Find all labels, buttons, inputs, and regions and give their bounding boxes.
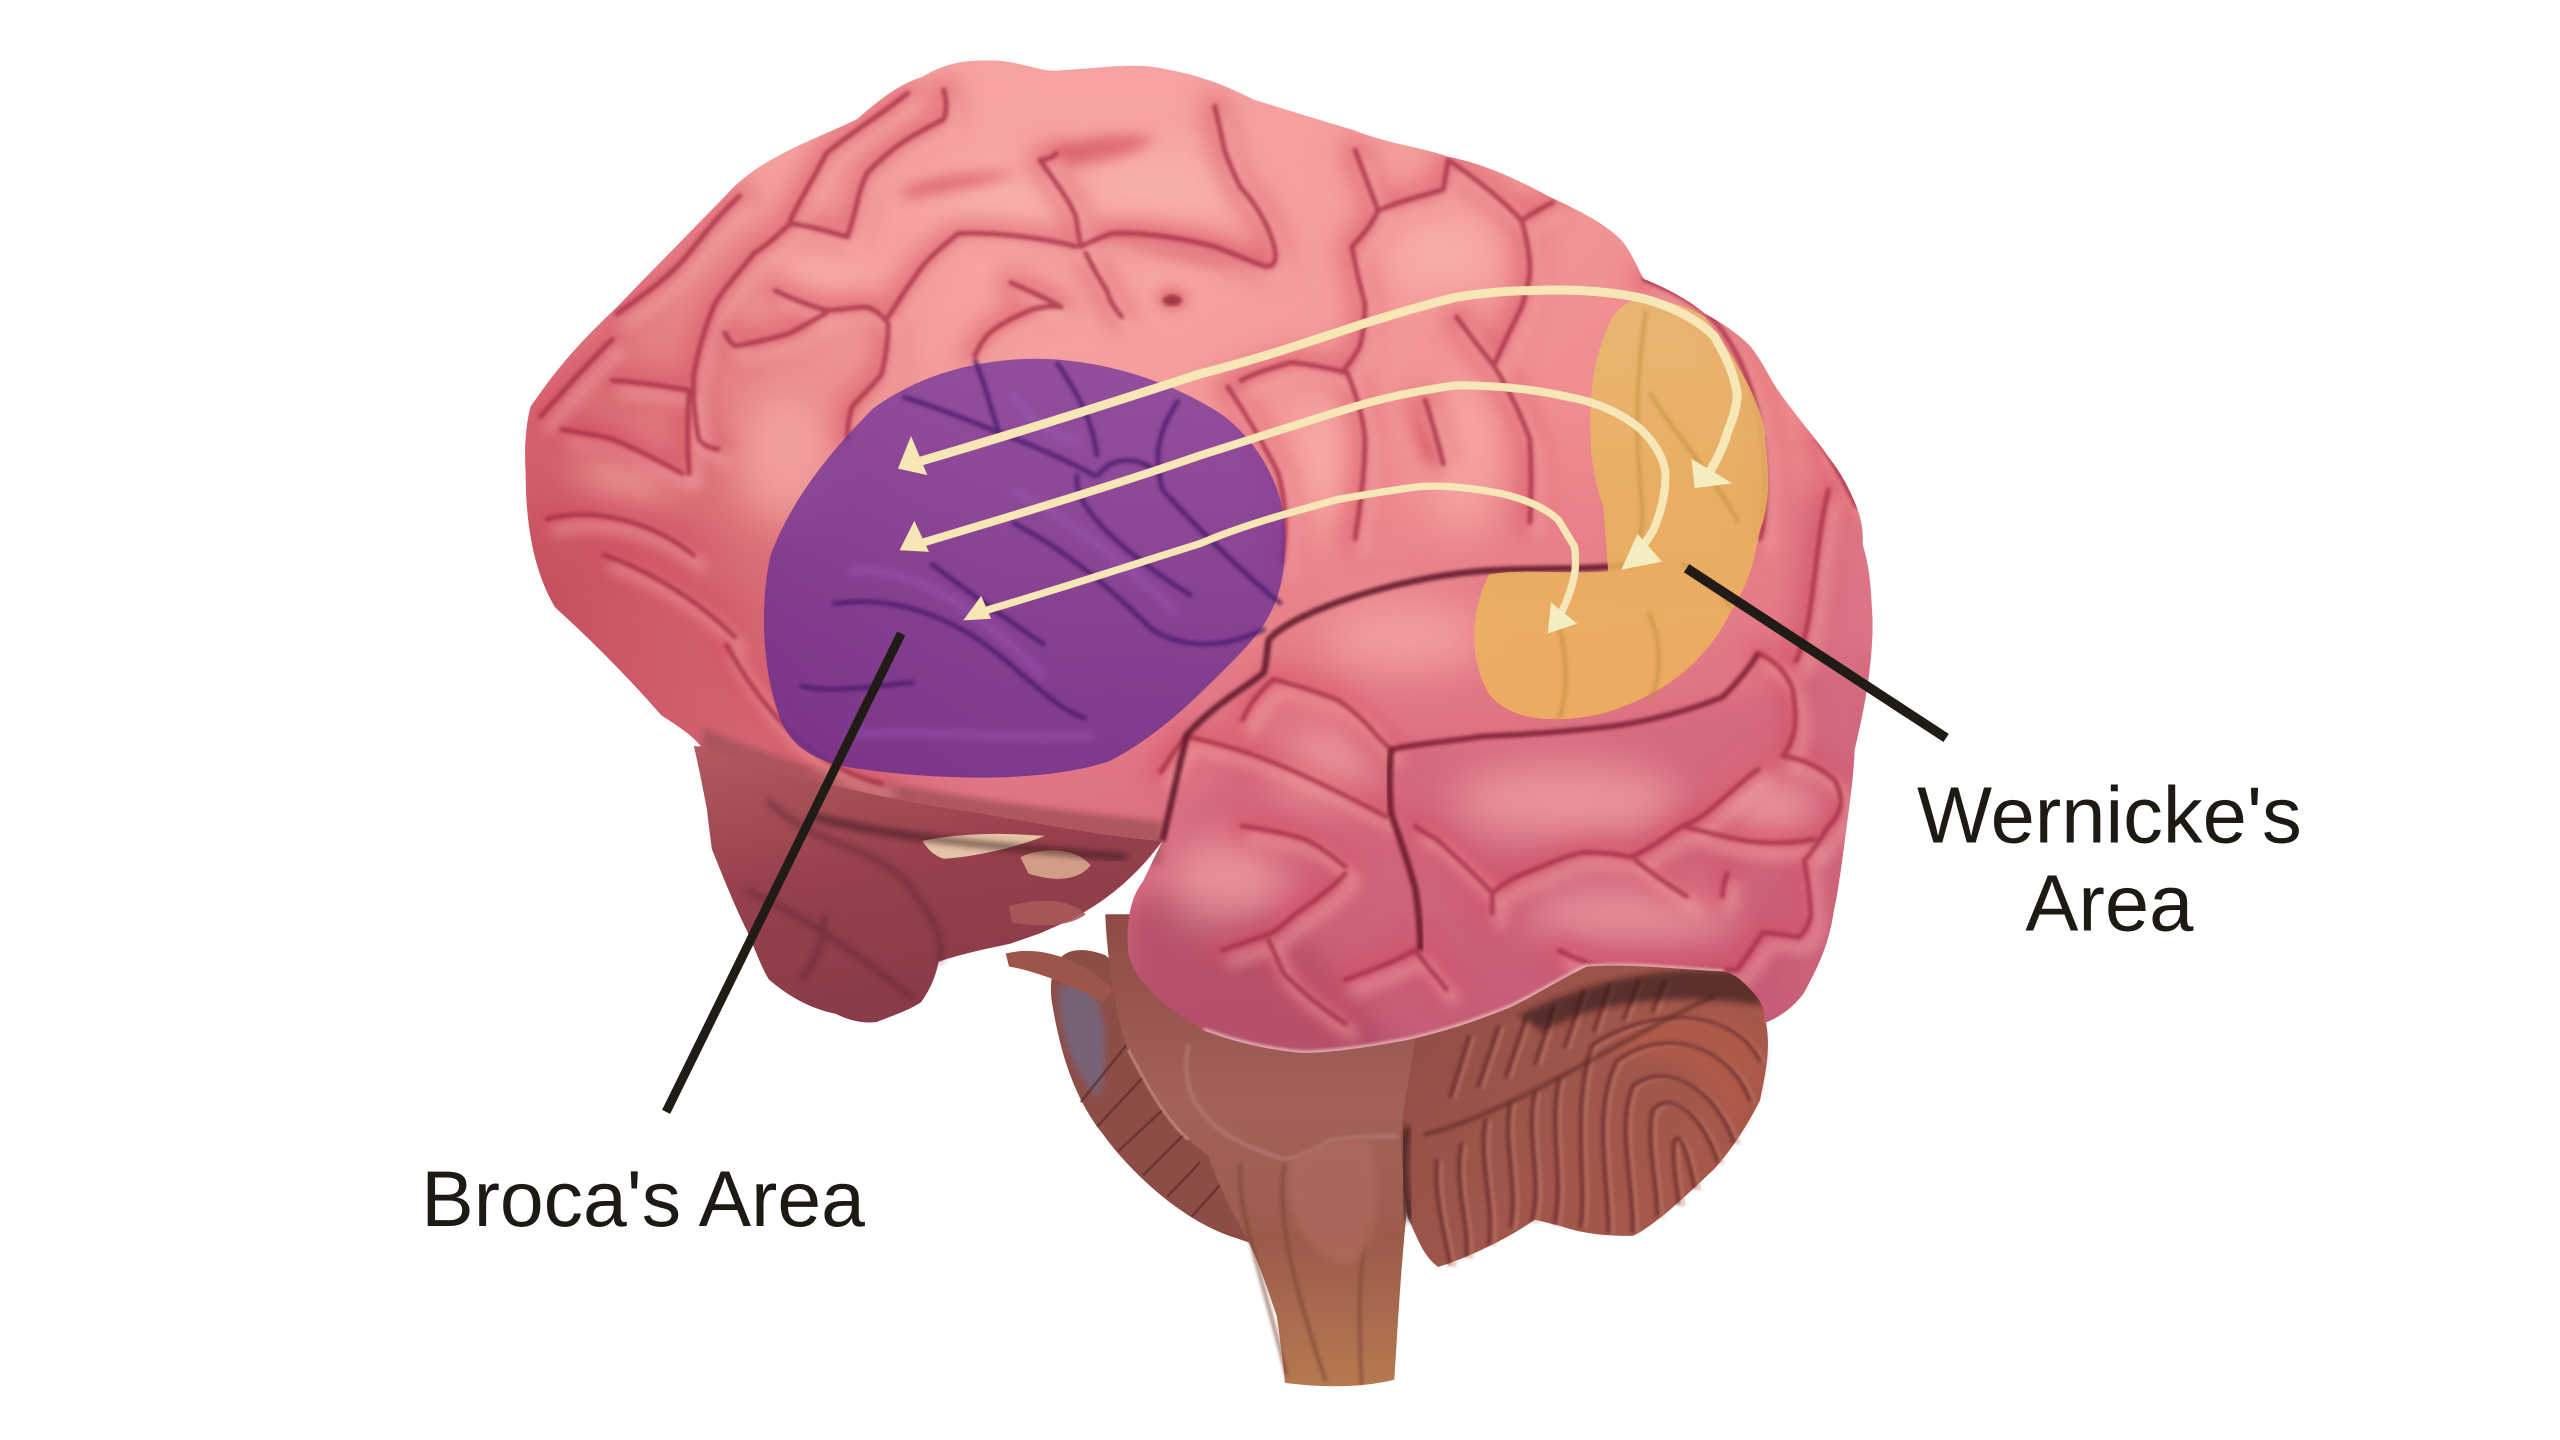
label: Wernicke's Area: Area [2025, 859, 2194, 948]
cerebrum [490, 49, 1894, 1078]
superior temporal sulcus [1391, 653, 1758, 749]
rear cerebellar folds beside the brainstem [1051, 950, 1254, 1244]
sulci [540, 90, 1856, 1024]
vertical temporal sulcus [1390, 749, 1420, 950]
brainstem and spinal cord [1006, 914, 1437, 1386]
leader line: Broca's area [666, 633, 901, 1112]
cerebellum [1401, 946, 1770, 1267]
arrow: middle pathway [900, 385, 1665, 570]
arrow: lower pathway [963, 486, 1577, 633]
arrow: upper pathway [898, 290, 1737, 488]
orbitofrontal lobe underside [694, 746, 1162, 1022]
gyrus pillows [576, 155, 1820, 944]
brain illustration [490, 49, 1894, 1386]
lateral fissure [1162, 563, 1633, 841]
sulcal wedges [575, 135, 1443, 470]
gyrus highlights [549, 101, 1864, 1035]
broad reddish halo around sulci [540, 90, 1856, 1024]
pale lower rim [1203, 966, 1724, 1053]
label: Wernicke's Area [1917, 770, 2302, 948]
label: Broca's Area: Broca's Area [421, 1155, 865, 1243]
cortical hole [1162, 295, 1182, 306]
orange Wernicke's region overlay [1474, 297, 1768, 719]
label: Wernicke's Area: Wernicke's [1917, 770, 2302, 859]
leader line: Wernicke's area [1687, 568, 1946, 738]
purple Broca's region overlay [764, 359, 1286, 778]
